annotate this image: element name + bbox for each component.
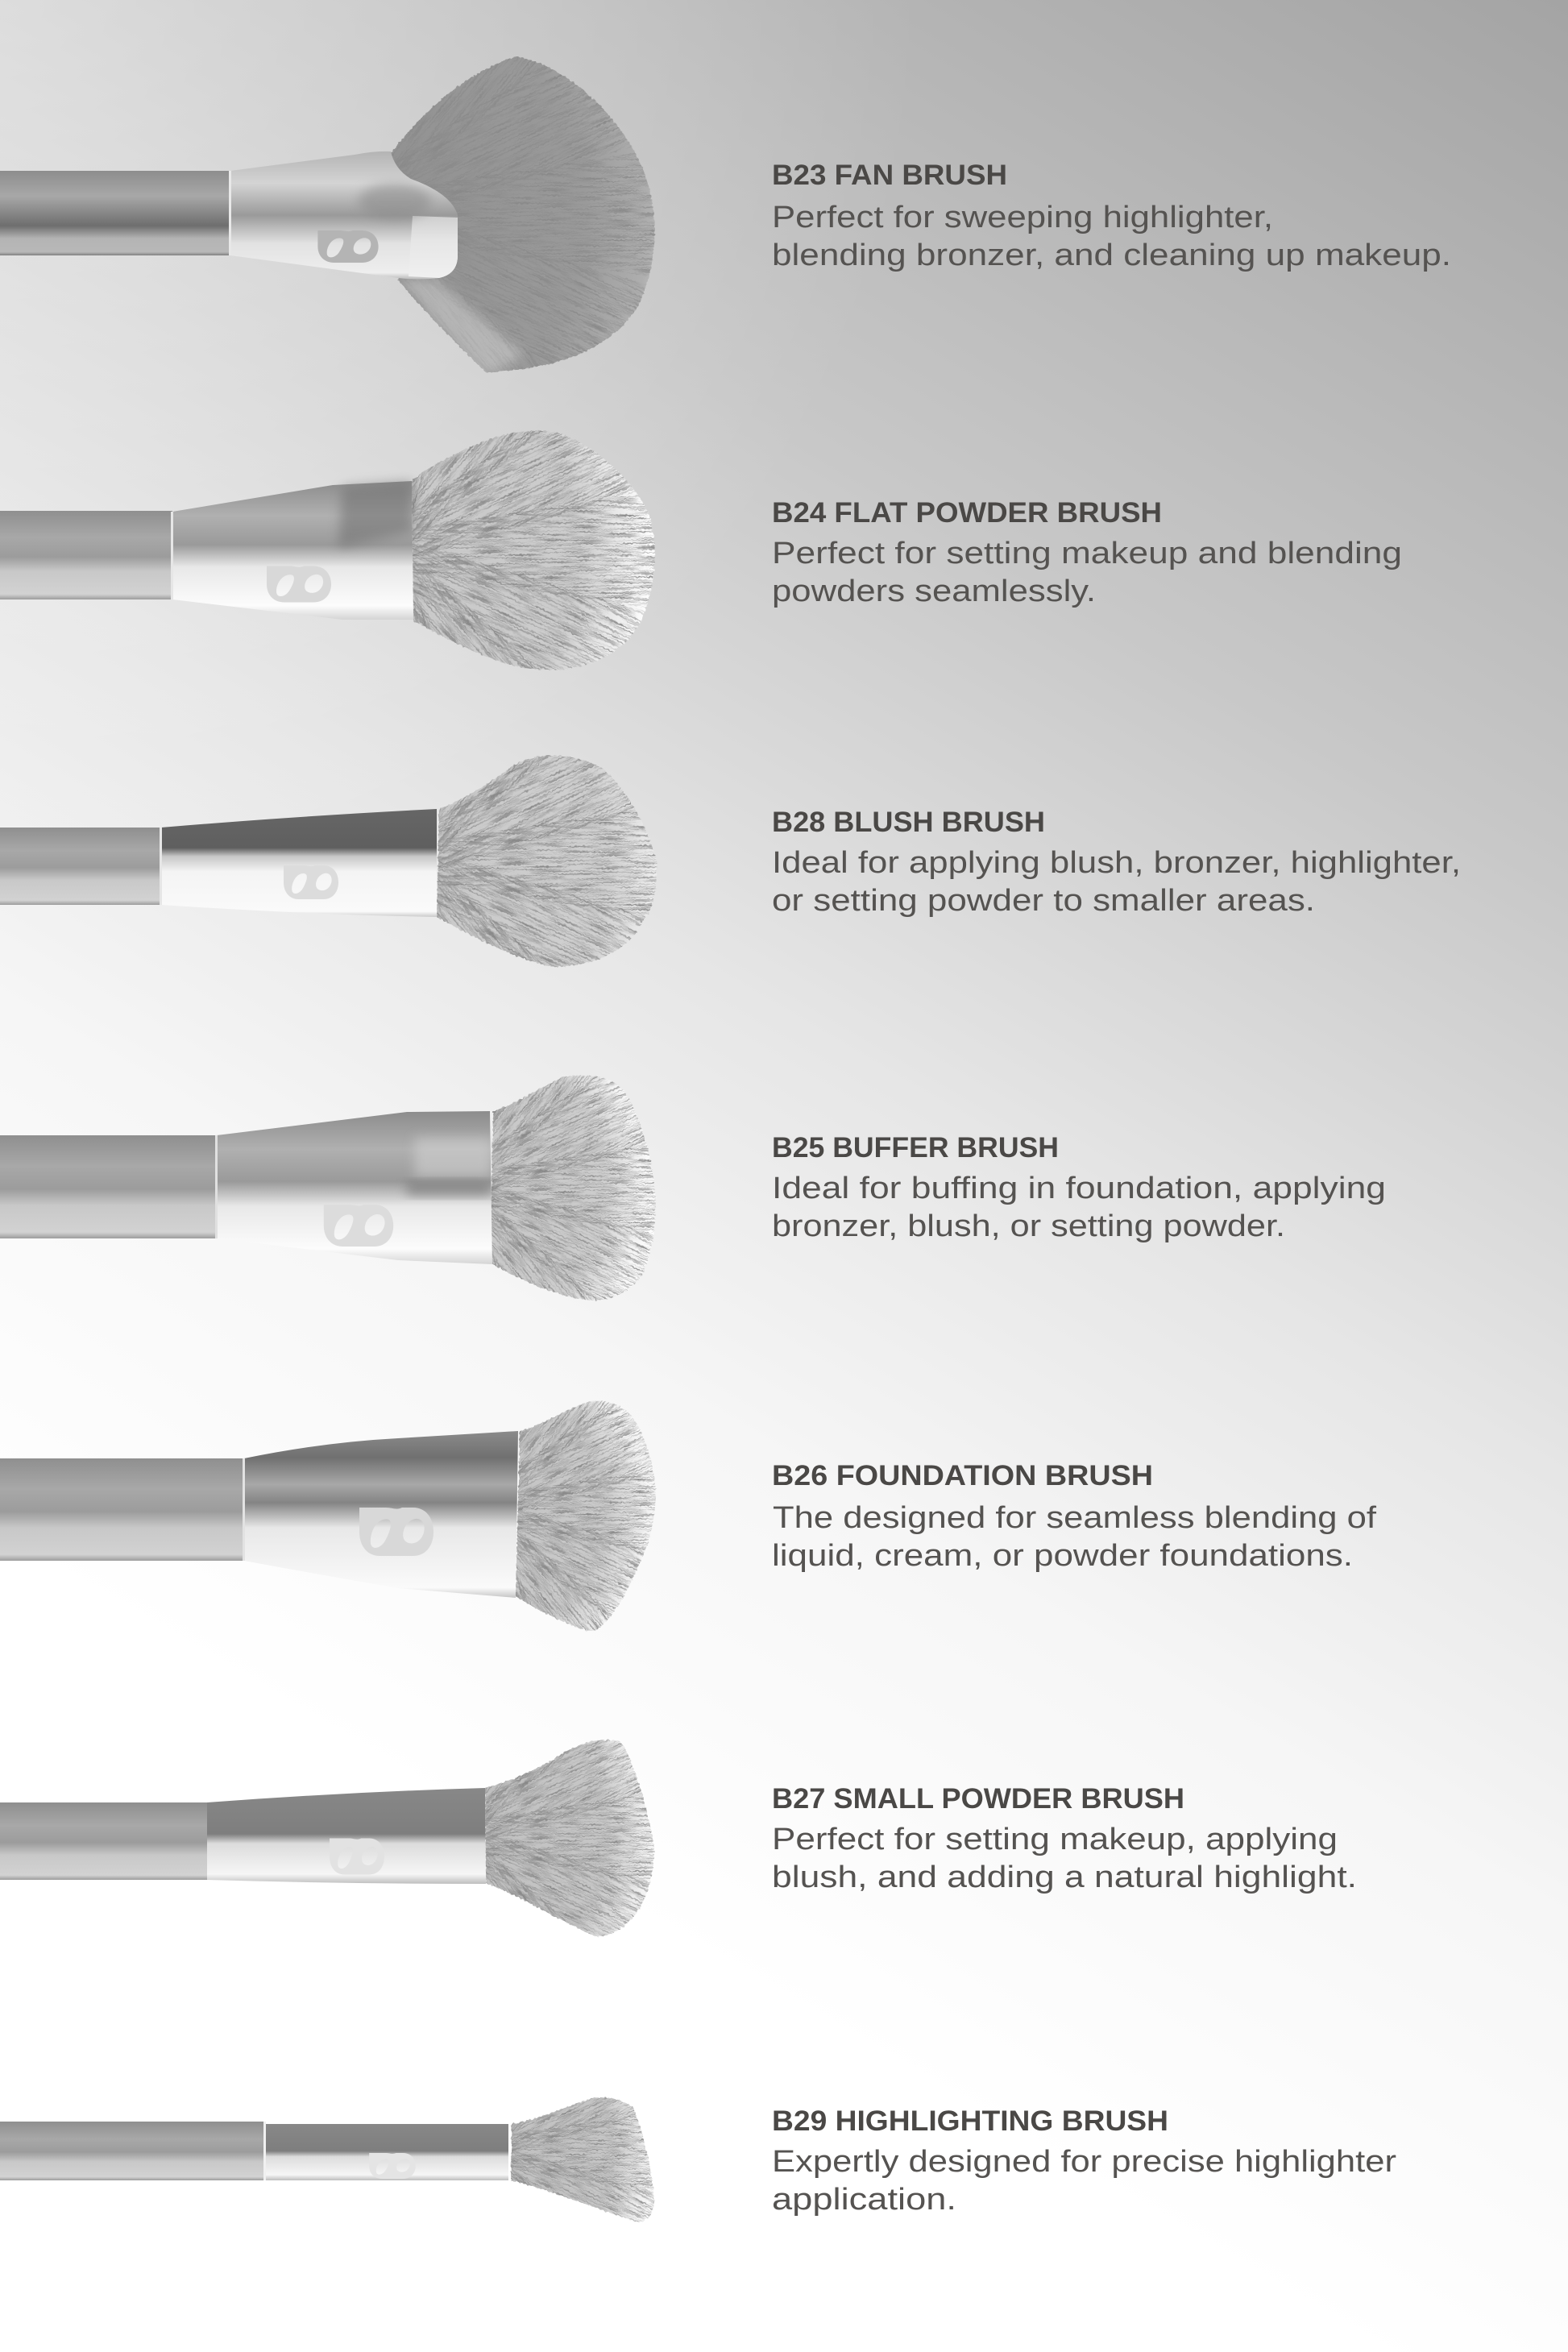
text: B23: B23 FAN BRUSH [772,160,1007,191]
text: B27: blush, and adding a natural highlight. [772,1860,1357,1894]
bristles [412,430,656,670]
text: B29 [772,2105,1396,2217]
ferrule [172,481,413,620]
ferrule [161,809,437,917]
logo mark [284,865,338,899]
brush: B24 flat powder brush [0,197,725,903]
bristles [492,1075,656,1301]
logo mark [324,1205,393,1247]
handle [0,1802,207,1880]
text: B26: liquid, cream, or powder foundations. [772,1539,1353,1573]
brush: B27 small powder brush [0,1739,655,2209]
logo mark [317,230,379,263]
ferrule [266,2124,508,2180]
text: B23: blending bronzer, and cleaning up makeup. [772,239,1451,272]
handle [0,1458,244,1561]
handle [0,2122,263,2180]
text: B25: B25 BUFFER BRUSH [772,1132,1059,1164]
text: B24: powders seamlessly. [772,575,1096,608]
text: B28: Ideal for applying blush, bronzer, highlighter, [772,846,1461,880]
logo mark [369,2153,416,2179]
brush: B29 highlighting brush [0,2097,654,2222]
handle [0,171,230,255]
bristles [516,1400,656,1631]
handle [0,511,172,599]
text: B24: Perfect for setting makeup and blending [772,537,1402,570]
text: B23 [772,160,1451,272]
logo mark [359,1508,433,1556]
logo mark [267,566,331,603]
text: B25: Ideal for buffing in foundation, applying [772,1172,1386,1205]
text: B27: Perfect for setting makeup, applying [772,1823,1338,1856]
bristles: fan [391,56,656,372]
background top-left highlight [0,0,967,967]
text: B26: B26 FOUNDATION BRUSH [772,1460,1153,1491]
brush: B28 blush brush [0,509,749,1215]
text: B29: B29 HIGHLIGHTING BRUSH [772,2105,1168,2137]
bristles [485,1739,655,1937]
text: B28 [772,807,1461,918]
text: B23: Perfect for sweeping highlighter, [772,201,1273,234]
text: B24 [772,497,1402,608]
text: B25: bronzer, blush, or setting powder. [772,1209,1285,1243]
ferrule [217,1111,492,1264]
handle [0,828,161,905]
logo mark [330,1839,384,1874]
text: B29: application. [772,2183,956,2217]
brush: B23 fan brush [0,0,693,566]
bristles [437,755,657,967]
text: B29: Expertly designed for precise highlighter [772,2145,1396,2179]
text: B26 [772,1460,1376,1573]
text: B25 [772,1132,1386,1243]
text: B28: or setting powder to smaller areas. [772,884,1315,918]
ferrule [230,151,458,279]
text: B28: B28 BLUSH BRUSH [772,807,1045,838]
ferrule [207,1788,486,1884]
text: B27 [772,1783,1357,1894]
handle [0,1135,217,1238]
brush: B25 buffer brush [0,906,728,1471]
text: B26: The designed for seamless blending of [773,1501,1376,1535]
text: B24: B24 FLAT POWDER BRUSH [772,497,1162,529]
bristles [511,2097,654,2222]
brush: B26 foundation brush [0,1229,753,1793]
ferrule [244,1431,518,1598]
text: B27: B27 SMALL POWDER BRUSH [772,1783,1184,1815]
